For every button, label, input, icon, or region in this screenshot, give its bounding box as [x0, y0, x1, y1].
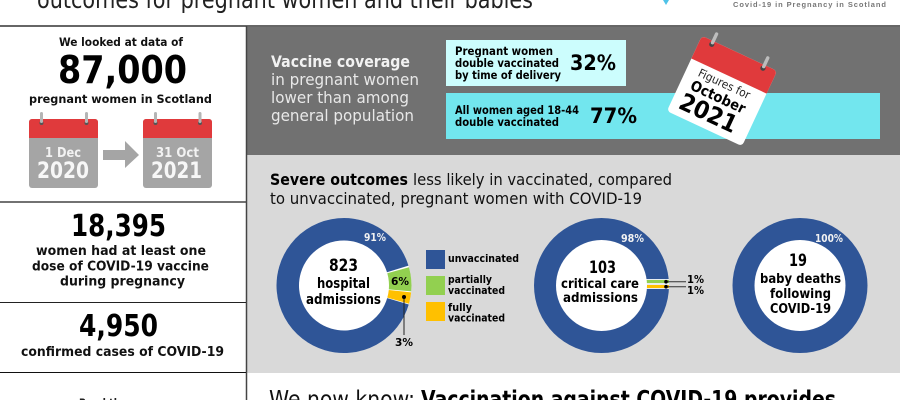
all women 77% bar: 77% [590, 104, 637, 128]
donut: baby deaths: following [770, 286, 831, 302]
panel: 18,395 vaccinated: dose of COVID-19 vaccine [32, 260, 209, 274]
icon: tilted calendar [667, 27, 781, 146]
donut: baby deaths: baby deaths [760, 271, 841, 287]
all women 77% bar [446, 93, 880, 139]
big number: 87,000 [58, 48, 187, 92]
donut: baby deaths: 100% [815, 232, 843, 245]
icon: tilted calendar: 2021 [675, 88, 742, 139]
icon: end calendar: 2021 [151, 159, 202, 184]
panel: 18,395 vaccinated [32, 209, 209, 290]
all women 77% bar: double vaccinated [455, 115, 559, 129]
legend: partially [448, 274, 492, 286]
pregnant women 32% bar: by time of delivery [455, 68, 561, 82]
legend: vaccinated [448, 312, 505, 324]
severe outcomes heading: to unvaccinated, pregnant women with COVID-19 [270, 189, 642, 208]
icon: tilted calendar: October [688, 78, 749, 118]
donut: critical care admissions: 1% [687, 284, 704, 297]
donut: critical care admissions: critical care [561, 277, 639, 292]
icon: end calendar: 31 Oct [156, 146, 199, 161]
all women 77% bar: All women aged 18-44 [455, 103, 579, 117]
icon: start calendar: 1 Dec [45, 146, 81, 161]
pregnant women 32% bar: Pregnant women [455, 44, 553, 58]
legend [426, 250, 519, 324]
panel: 4,950 cases: 4,950 [79, 309, 158, 344]
legend: vaccinated [448, 285, 505, 297]
severe outcomes heading: Severe outcomes [270, 170, 408, 189]
donut: baby deaths: COVID-19 [770, 301, 831, 317]
population label: pregnant women in Scotland [29, 92, 212, 106]
panel: 18,395 vaccinated: during pregnancy [60, 274, 185, 290]
donut: critical care admissions: 98% [621, 232, 644, 245]
donut: hospital admissions: admissions [306, 292, 381, 308]
pregnant women 32% bar: double vaccinated [455, 56, 559, 70]
donut: critical care admissions: admissions [563, 291, 638, 306]
panel: 4,950 cases [21, 309, 224, 360]
donut: hospital admissions: 3% [395, 336, 413, 349]
coverage heading: general population [271, 106, 414, 125]
donut: hospital admissions: hospital [317, 276, 370, 292]
panel: 4,950 cases: confirmed cases of COVID-19 [21, 345, 224, 360]
donut: critical care admissions [534, 218, 704, 353]
legend: fully [448, 302, 472, 314]
coverage heading: Vaccine coverage [271, 52, 410, 71]
coverage heading: in pregnant women [271, 70, 419, 89]
panel: vaccine coverage [247, 27, 900, 155]
donut: baby deaths [732, 218, 868, 353]
icon: start calendar [29, 112, 98, 188]
logo: Covid-19 in Pregnancy in Scotland [733, 0, 886, 9]
donut: hospital admissions [274, 216, 414, 355]
legend: unvaccinated [448, 253, 519, 265]
donut: critical care admissions: 1% [687, 273, 704, 286]
pregnant women 32% bar: 32% [570, 51, 616, 75]
intro text: We looked at data of [59, 35, 184, 49]
panel: severe outcomes [247, 155, 900, 373]
severe outcomes heading [270, 170, 672, 208]
severe outcomes heading: less likely in vaccinated, compared [413, 170, 672, 189]
donut: hospital admissions: 91% [364, 231, 386, 244]
panel: 18,395 vaccinated: 18,395 [71, 209, 166, 244]
donut: critical care admissions: 103 [589, 258, 616, 278]
conclusion text [269, 387, 836, 400]
donut: baby deaths: 19 [789, 251, 807, 271]
coverage heading [271, 52, 419, 125]
coverage heading: lower than among [271, 88, 409, 107]
donut: hospital admissions: 6% [391, 275, 409, 288]
icon: end calendar [143, 112, 212, 188]
logo [663, 0, 886, 9]
donut: hospital admissions: 823 [329, 256, 358, 276]
icon: tilted calendar: Figures for [696, 66, 753, 102]
arrow [103, 141, 139, 168]
panel: 18,395 vaccinated: women had at least one [36, 244, 206, 259]
icon: start calendar: 2020 [37, 159, 89, 184]
pregnant women 32% bar [446, 40, 626, 86]
panel: 87,000 women [29, 35, 212, 188]
